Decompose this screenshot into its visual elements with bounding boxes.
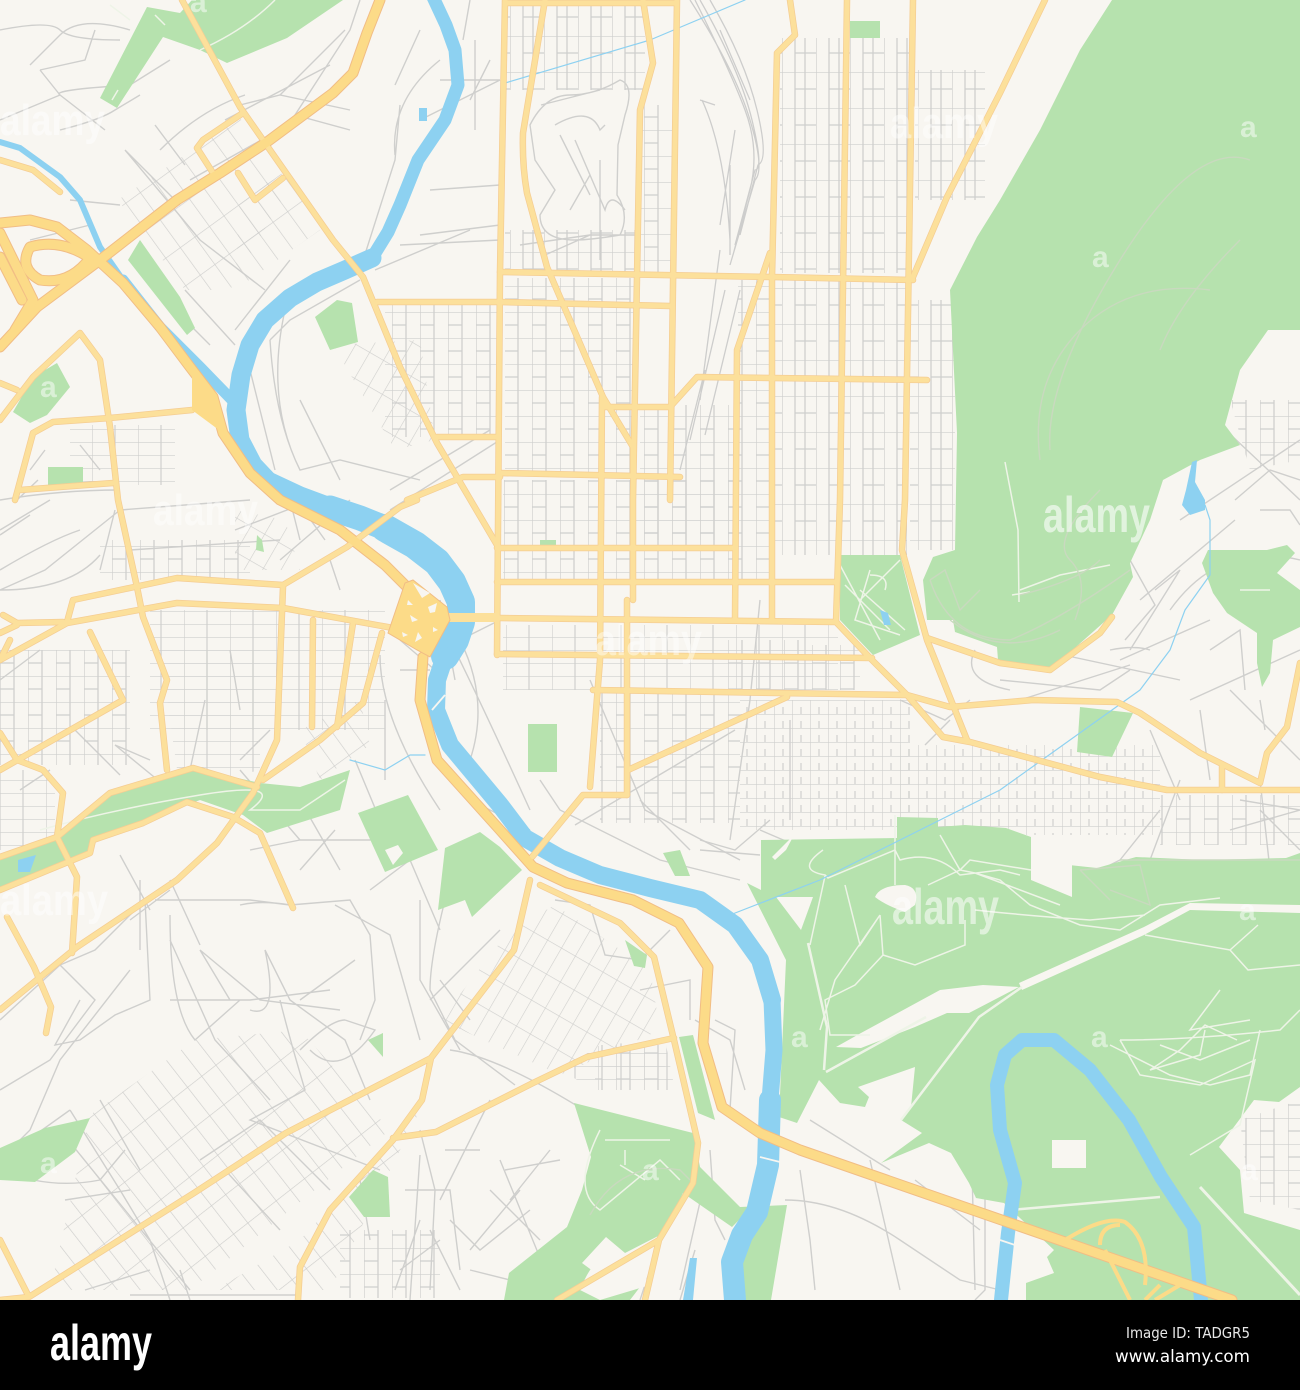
park: green strip [0, 768, 350, 890]
river: south channel [770, 1000, 774, 1100]
watermark letters: a [1091, 1021, 1108, 1054]
watermark letters: a [40, 371, 57, 404]
rail yard [600, 0, 763, 470]
watermark letters: a [791, 1021, 808, 1054]
park: south central [504, 1103, 746, 1300]
watermark: north-east: alamy [890, 99, 998, 148]
footer bar [0, 1300, 1300, 1390]
watermark letters: a [40, 1147, 57, 1180]
watermark letters: a [1239, 894, 1256, 927]
website: www.alamy.com [1115, 1347, 1250, 1367]
river: main bend [270, 483, 335, 510]
river: loop [997, 1040, 1201, 1300]
watermark: west: alamy [153, 486, 258, 535]
park: sports field [315, 300, 358, 350]
clearings inside parks [385, 835, 1300, 1300]
river: city bend [385, 528, 461, 656]
interchange: central [388, 580, 450, 657]
river: main upper [345, 0, 458, 270]
stream lines [350, 0, 1210, 915]
park: ne blob [1202, 545, 1300, 687]
river: main middle [236, 258, 372, 483]
park: north-west hill [100, 0, 343, 108]
watermark letters: a [1241, 1154, 1258, 1187]
watermark: south-west: alamy [0, 876, 108, 925]
river: western creek [0, 142, 123, 280]
watermark: east: alamy [1043, 487, 1150, 543]
park: city park [840, 555, 920, 655]
river: main lower [436, 656, 772, 1000]
interchange: west second [192, 367, 223, 433]
watermark: south: alamy [892, 879, 999, 935]
watermark letters: a [1240, 111, 1257, 144]
interchange: south-east [1065, 1220, 1180, 1300]
lakes [18, 108, 1205, 1300]
watermark letters: a [1092, 241, 1109, 274]
park: south ridge [747, 817, 1300, 1300]
image id: Image ID: TADGR5 [1126, 1324, 1250, 1342]
watermark: north-west: alamy [0, 96, 105, 145]
watermark: centre: alamy [595, 616, 702, 665]
park: east mountain [923, 0, 1300, 670]
bridge road [448, 613, 498, 622]
grey park tracks [590, 157, 1300, 1215]
park: south field a [358, 795, 438, 872]
bridge lines [432, 695, 1045, 1255]
park: south field b [438, 832, 522, 917]
watermark letters: a [642, 1154, 659, 1187]
river: widening [330, 508, 390, 530]
footer logo: alamy [50, 1315, 152, 1371]
